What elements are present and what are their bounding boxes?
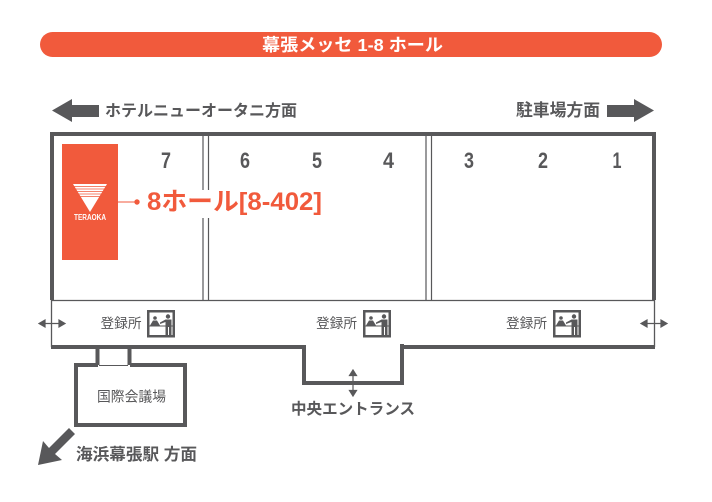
- hall numbers: 3: [464, 148, 474, 173]
- direction: parking: [516, 99, 654, 122]
- arrow: central entrance: [350, 370, 356, 396]
- callout: booth number: 8ホール[8-402]: [147, 188, 322, 216]
- registration desk: right: 登録所: [506, 316, 548, 331]
- label: central entrance: 中央エントランス: [291, 400, 415, 418]
- international conference hall: 国際会議場: [97, 388, 166, 404]
- arrow: left corridor exit: [39, 320, 65, 327]
- floor plan: corridor and central entrance: [51, 300, 655, 383]
- hall numbers: 6: [240, 148, 250, 173]
- direction: parking: 駐車場方面: [516, 100, 600, 120]
- registration desk: left: 登録所: [100, 316, 142, 331]
- icon: Teraoka logo: TERAOKA: [74, 213, 106, 222]
- registration desk: center: [316, 311, 390, 336]
- hall numbers: 4: [383, 148, 395, 173]
- booth: Teraoka: [62, 144, 118, 260]
- hall numbers: 7: [161, 148, 171, 173]
- registration desk: center: 登録所: [316, 316, 358, 331]
- registration desk: right: [506, 311, 580, 336]
- hall numbers: 1: [612, 148, 622, 173]
- hall numbers: 2: [538, 148, 548, 173]
- international conference hall: [76, 347, 185, 425]
- label: Kaihin-Makuhari station: 海浜幕張駅 方面: [76, 444, 197, 464]
- registration desk: left: [100, 311, 174, 336]
- arrow: Kaihin-Makuhari station: [38, 428, 75, 465]
- arrow: right corridor exit: [641, 320, 667, 327]
- direction: Hotel New Otani: [52, 99, 297, 122]
- hall numbers: 5: [312, 148, 322, 173]
- hall numbers: [161, 148, 622, 173]
- title banner: [40, 32, 662, 57]
- direction: Hotel New Otani: ホテルニューオータニ方面: [105, 101, 297, 120]
- floor plan: exhibition halls: [52, 134, 654, 300]
- title banner: 幕張メッセ 1-8 ホール: [262, 35, 443, 55]
